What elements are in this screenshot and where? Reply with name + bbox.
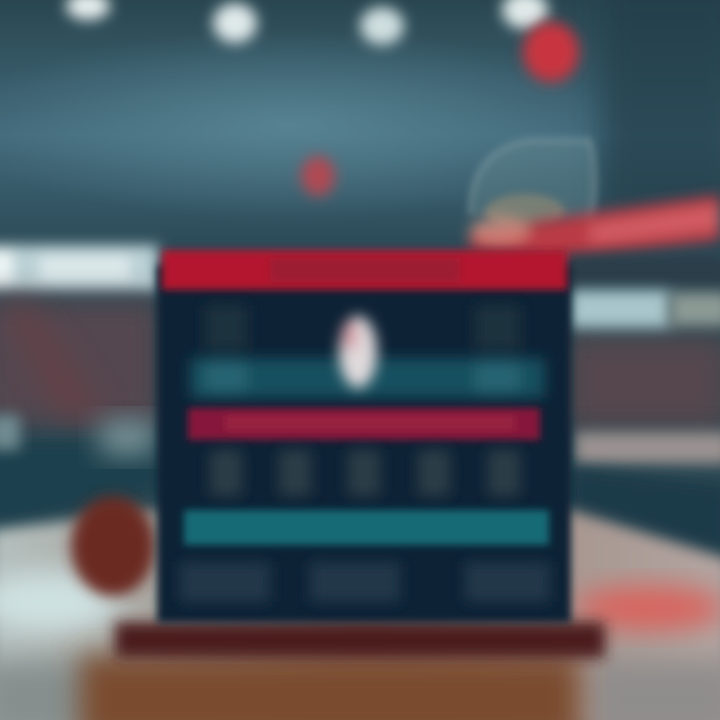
teal band xyxy=(184,510,549,545)
red arena banner xyxy=(470,195,720,258)
basketball hoop backboard xyxy=(470,140,595,230)
right stands xyxy=(565,255,720,555)
wooden table xyxy=(80,622,605,720)
ceiling lights xyxy=(66,0,548,45)
red divider band xyxy=(188,408,540,440)
left stands xyxy=(0,300,160,530)
left white light band xyxy=(0,245,158,292)
small red marker xyxy=(301,156,335,196)
bottom stat cells xyxy=(180,562,550,602)
background: arena wall xyxy=(0,0,720,300)
court floor xyxy=(0,510,720,720)
red hanging ball xyxy=(523,22,579,82)
stat cells row xyxy=(210,450,520,496)
basketball xyxy=(71,496,155,596)
scoreboard header: red bar xyxy=(162,250,567,290)
logo figure xyxy=(339,316,377,388)
scoreboard panel xyxy=(157,250,571,623)
upper section with logo columns xyxy=(190,305,545,398)
